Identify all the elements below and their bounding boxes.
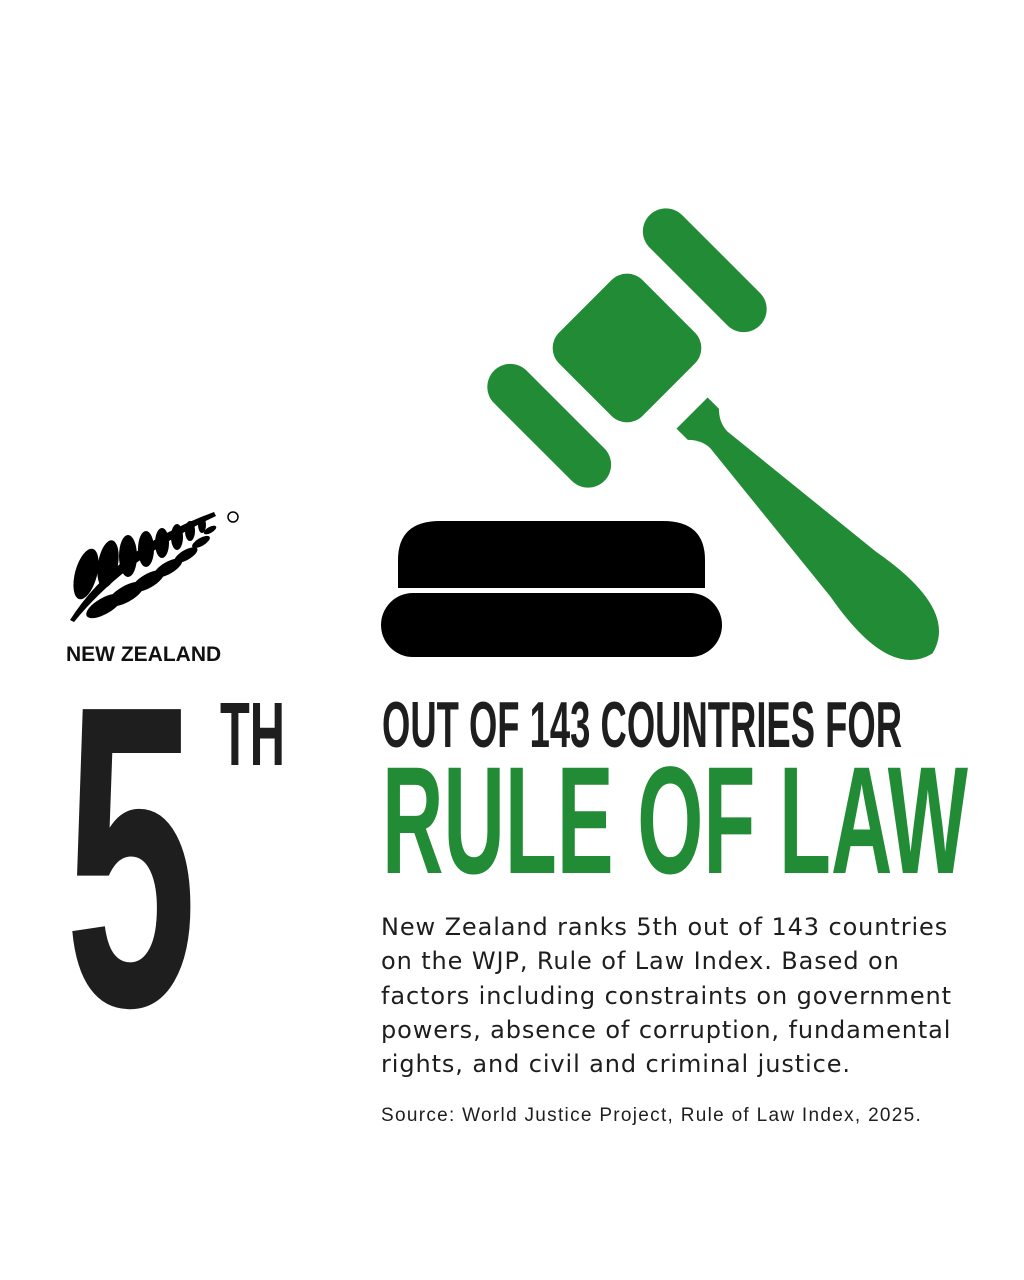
gavel icon (381, 208, 939, 660)
superscript TH: TH (220, 685, 285, 785)
body text: on the WJP, Rule of Law Index. Based on (381, 947, 900, 975)
headline text (65, 680, 968, 1020)
body text: rights, and civil and criminal justice. (381, 1050, 851, 1078)
logo: New Zealand fern: NEW ZEALAND (66, 643, 221, 666)
source: Source: World Justice Project, Rule of Law Index, 2025. (381, 1105, 922, 1126)
body text: New Zealand ranks 5th out of 143 countries (381, 913, 948, 941)
gavel head and handle (478, 199, 1024, 748)
body text: powers, absence of corruption, fundamental (381, 1016, 951, 1044)
body text: factors including constraints on government (381, 982, 952, 1010)
gavel base (381, 521, 722, 657)
body text (381, 913, 952, 1078)
logo: New Zealand fern (66, 511, 239, 666)
